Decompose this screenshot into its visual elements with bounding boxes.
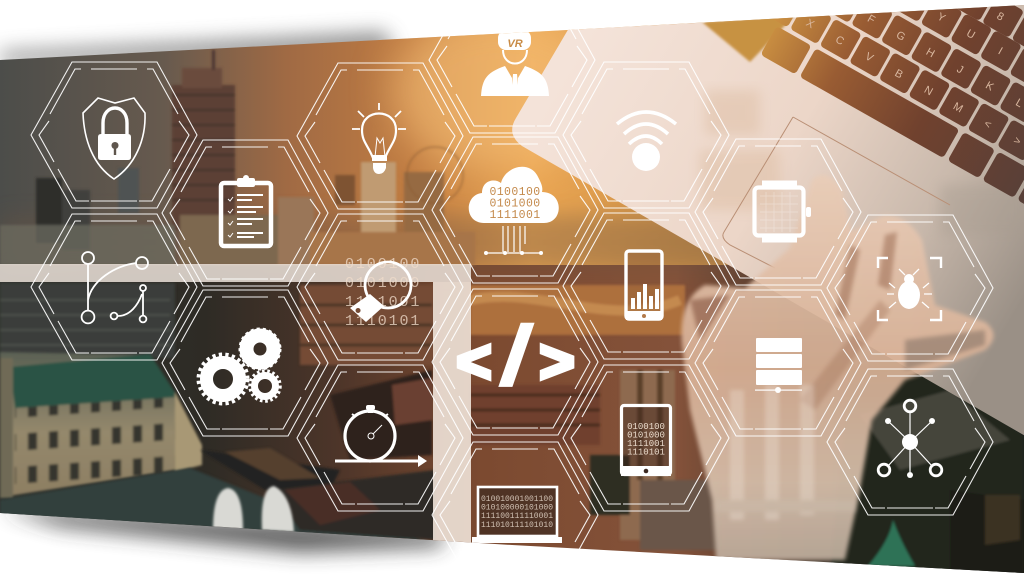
row: bottom letters [782, 18, 793, 26]
hexagon: laptop code [431, 442, 599, 551]
icon: binary cloud: 0100100 [489, 186, 541, 199]
icon: binary cloud [469, 167, 559, 255]
row: home keys [792, 0, 834, 6]
key legends: B [893, 67, 905, 81]
key legends: Y [935, 11, 948, 25]
icon: tablet with binary: 1111001 [627, 439, 665, 449]
hexagon: tablet [563, 365, 729, 511]
icon: laptop with binary screen: 010010001001100 [481, 495, 553, 504]
white horizontal strip [0, 264, 471, 282]
icon: tablet with binary: 1110101 [627, 448, 665, 458]
icon: code brackets: > [539, 328, 575, 395]
key legends: > [1011, 135, 1023, 148]
icon: binary cloud: 0101000 [489, 198, 541, 210]
hand shading [690, 232, 985, 410]
icon: code brackets: < [456, 328, 492, 395]
hexagon: checklist [162, 140, 328, 286]
building columns seen through the hand [716, 385, 856, 520]
icon: binary digits with magnifier: 0100100 [345, 256, 421, 273]
icon: binary digits with magnifier [345, 256, 421, 330]
laptop keyboard [762, 6, 1024, 204]
icon: laptop with binary screen: 010100000101000 [481, 504, 553, 512]
sky and warm glow [0, 5, 1024, 265]
icon: tablet with binary [621, 406, 671, 476]
key legends: G [894, 29, 907, 44]
hexagon: network [827, 369, 993, 515]
icon: bug in scan brackets [878, 258, 941, 320]
hand [681, 175, 994, 560]
white vertical strip [433, 282, 471, 552]
icon: binary digits with magnifier: 1111001 [345, 294, 421, 311]
shadow below the bottom edge [0, 508, 445, 552]
icon: laptop with binary screen: 111010111101010 [481, 521, 553, 530]
hexagon: server [695, 290, 861, 436]
hexagon: idea [297, 63, 463, 209]
icon: stopwatch with arrow [335, 405, 427, 467]
icon: person with VR headset: VR [507, 38, 523, 50]
key legends: I [996, 45, 1004, 57]
rooftops foreground [0, 370, 440, 545]
icon: three gears [199, 330, 280, 403]
icon: laptop with binary screen: 111100111110001 [481, 512, 553, 521]
key legends: F [865, 13, 877, 27]
icon: shield and padlock [83, 98, 145, 179]
laptop body [512, 0, 1024, 456]
gold wedge by the keyboard [702, 15, 795, 62]
touchpad outline [723, 117, 950, 268]
key legends: K [983, 80, 996, 94]
key legends: X [804, 17, 817, 31]
key legends: U [964, 27, 977, 42]
hexagon: phone analytics [563, 213, 729, 359]
hexagon: binary search [297, 214, 463, 360]
icon: person with VR headset [481, 30, 549, 96]
hexagon: cloud data [432, 137, 598, 283]
icon: binary digits with magnifier: 1110101 [345, 313, 421, 330]
key legends: M [951, 100, 965, 115]
icon: bezier curves [82, 252, 148, 323]
distant city skyline [0, 50, 720, 550]
hexagon: security shield [31, 62, 197, 208]
icon: server rack [755, 338, 802, 393]
row: space bar and modifiers [762, 28, 810, 73]
key legends: N [922, 84, 935, 98]
icon: binary digits with magnifier: 0101000 [345, 275, 421, 292]
icon: connected nodes [878, 400, 942, 478]
icon: tablet with binary: 0100100 [627, 422, 665, 432]
key legends [806, 12, 1020, 143]
icon: clipboard [221, 175, 271, 246]
hexagon: gears [162, 290, 328, 436]
icon: binary cloud: 1111001 [489, 209, 541, 222]
hexagon: VR user [428, 29, 596, 134]
key legends: V [863, 51, 876, 65]
key legends: 8 [995, 10, 1006, 24]
icon: code brackets: / [498, 311, 534, 401]
key legends: J [954, 63, 965, 76]
fingertips at the bottom [213, 486, 294, 532]
icon: smartwatch [754, 183, 811, 240]
left cream building with green roof [0, 352, 202, 498]
icon: wifi signal [617, 112, 676, 171]
icon: code brackets [456, 311, 575, 401]
shadow above the top edge [0, 32, 395, 64]
hexagon: stopwatch [297, 365, 463, 511]
hexagon: bug scan [827, 215, 993, 361]
city ghost on laptop [698, 88, 981, 229]
icon: tablet with binary: 0101000 [627, 430, 665, 440]
key legends: < [982, 118, 993, 131]
icon: laptop with binary screen [472, 487, 562, 543]
hexagon: curve editor [31, 214, 197, 360]
icon: light bulb [352, 103, 406, 174]
hexagon: smartwatch [695, 139, 861, 285]
hexagon: wifi [563, 62, 729, 208]
key legends: C [833, 34, 846, 48]
key legends: H [924, 46, 937, 60]
dark lower right city with green dome [830, 390, 1024, 573]
hexagon: source code [432, 289, 598, 435]
icon: smartphone with bars [626, 251, 662, 320]
